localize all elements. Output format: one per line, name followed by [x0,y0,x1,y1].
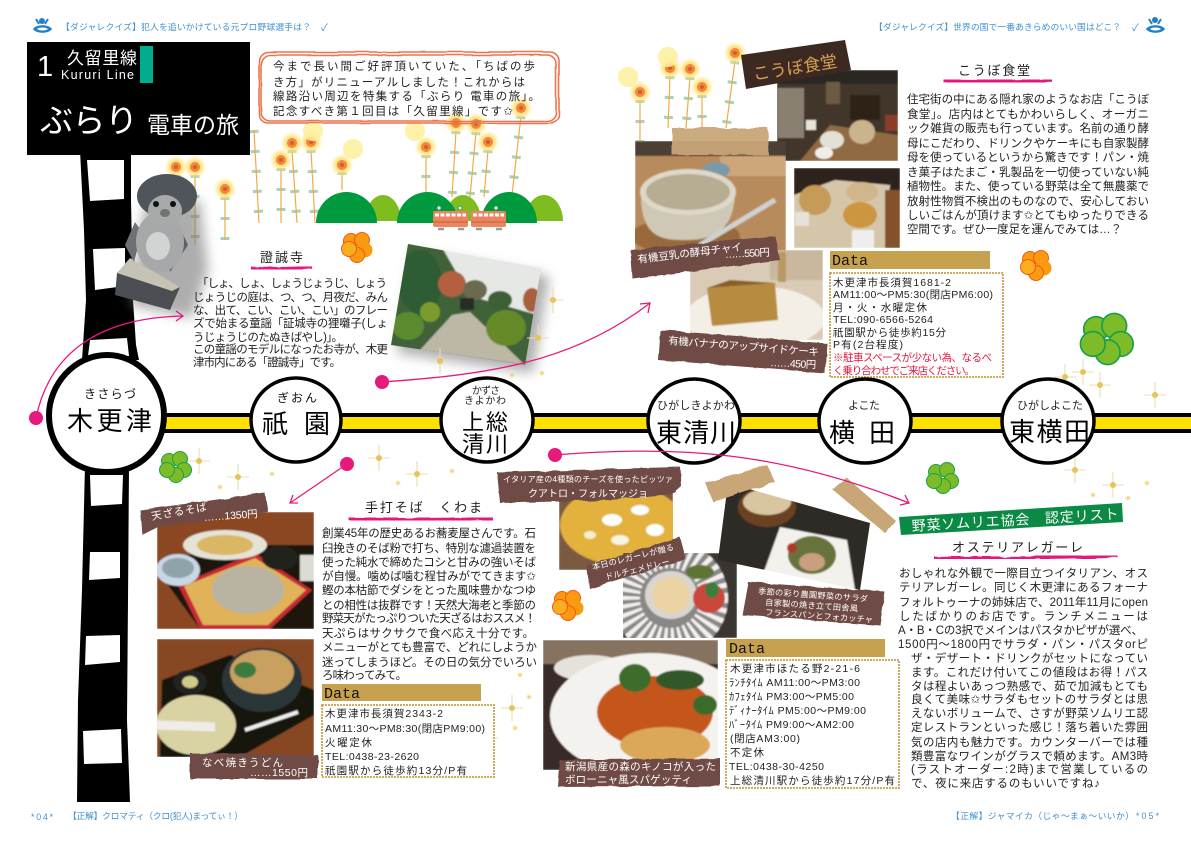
temple text: この童謡のモデルになったお寺が、木更 [193,342,388,356]
body text: 定レストランといった感じ！落ち着いた雰囲 [911,720,1148,734]
photo: pizza [559,493,673,570]
body text: ます。これだけ付いてこの値段はお得！パス [911,665,1148,679]
temple text [193,277,388,369]
page number: *05* [1136,811,1160,821]
data header: Data [324,686,360,703]
heading: こうぼ食堂 [958,63,1030,78]
icon: blue mascot logo right [1146,17,1165,33]
body text: ろ味わってみて。 [322,669,407,682]
reading: かずさ [472,385,500,397]
body text: 空間です。ぜひ一度足を運んでみては…？ [907,223,1122,236]
body text: したばかりのお店です。ランチメニューは [899,610,1148,623]
station: Kisarazu [49,355,164,472]
body text [898,566,1148,790]
body text: おしゃれな外観で一際目立つイタリアン、オス [899,566,1148,580]
photo: tanuki statue [115,174,208,318]
rail: vertical black track [77,150,139,802]
green certified label: 野菜ソムリエ協会 認定リスト [911,506,1119,534]
intro text: 今まで長い間ご好評頂いていた、「ちばの歩 [273,59,535,73]
photo: dessert [623,553,737,638]
intro text: 記念すべき第１回目は「久留里線」です✩ [273,104,513,118]
photo: bread [794,168,900,248]
reading: きさらづ [84,387,136,401]
body text: 使った純水で締めたコシと甘みの強いそば [322,555,536,569]
temple text: じょうじの庭は、つ、つ、月夜だ、みん [193,290,388,304]
data box [830,273,1003,377]
quiz answer: 【正解】ジャマイカ（じゃ～まぁ～いいか） [951,810,1134,821]
name: 祇 園 [262,409,330,439]
quiz answer: 【正解】クロマティ（クロ(犯人)まってぃ！） [68,810,243,821]
footer right [951,810,1160,821]
photo: nabeyaki udon [156,639,314,757]
caption subtitle: ドルチェメドレー [604,557,671,582]
caption text: 本日のレガーレが贈る [591,542,675,572]
panel: soba kuwama [140,493,538,779]
caption text: なべ焼きうどん [202,757,283,769]
rough red border [259,52,559,123]
body text: 天ぷらはサクサクで食べ応え十分です。 [322,626,534,640]
body text: A・B・Cの3択でメインはパスタかピザが選べ、 [898,623,1143,637]
heading: オステリアレガーレ [952,540,1083,555]
decorative flower garden: left [164,96,533,245]
data box: 上総清川駅から徒歩約17分/P有 [730,774,895,787]
name line 2: 清川 [462,432,508,457]
panel: temple [193,232,550,373]
data box: ﾊﾞｰﾀｲﾑ PM9:00～AM2:00 [729,719,854,731]
data box: TEL:0438-30-4250 [729,761,824,773]
heading: 手打そば くわま [365,500,482,515]
caption: pizza [497,467,681,503]
panel: osteria legare text [898,503,1148,790]
caption: banana cake [658,330,827,373]
caption line 2: 自家製の焼き立て田舎風 [765,597,858,613]
intro text: き方」がリニューアルしました！これからは [273,75,525,89]
photo: pasta [543,640,718,770]
caption line 3: フランスパンとフォカッチャ [765,608,873,625]
data box: 木更津市長須賀2343-2 [325,707,443,720]
line name: 久留里線 [67,49,137,68]
caption: salad [742,582,885,625]
data box: ﾃﾞｨﾅｰﾀｲﾑ PM5:00～PM9:00 [729,705,866,717]
data box: く乗り合わせでご来店ください。 [833,364,975,377]
sign lettering: こうぼ食堂 [752,52,839,84]
body text: ザ・デザート・ドリンクがセットになってい [911,651,1148,665]
icon: orange train [433,206,506,229]
body text: 迷ってしまうほど。その日の気分でいろい [322,655,537,669]
caption: pasta [558,758,720,787]
caption subtitle: ボローニャ風スパゲッティ [565,774,692,786]
data header [726,639,885,658]
body text: テリアレガーレ。同じく木更津にあるフォーナ [899,581,1148,594]
station: Yokota [819,379,911,463]
body text: しいごはんが頂けます✩とてもゆったりできる [907,208,1149,222]
intro box [259,52,559,123]
temple text: 「しょ、しょ、しょうじょうじ、しょう [197,277,387,290]
quiz header right [874,17,1165,34]
tape: salad right [833,478,895,533]
body text: 類豊富なワインがグラスで頼めます。AM3時 [911,749,1148,763]
body text [907,92,1150,236]
data header: Data [832,253,868,270]
caption text: イタリア産の4種類のチーズを使ったピッツァ [503,474,673,484]
quiz question left: 【ダジャレクイズ】犯人を追いかけている元プロ野球選手は？ [61,21,311,32]
arrow: Kazusa-Kiyokawa to osteria [548,448,909,505]
photo: shop interior [777,70,898,161]
body text: 創業45年の歴史あるお蕎麦屋さんです。石 [322,526,536,540]
caption: dessert [587,537,686,589]
data box: ※駐車スペースが少ない為、なるべ [833,351,992,364]
photo: salad and bread [718,489,870,590]
station: Gion [251,378,341,462]
body text: 放射性物質不検出のものなので、安心しておい [907,194,1149,208]
data box: 祇園駅から徒歩約13分/P有 [325,764,467,777]
icon: green flower centre [926,462,958,494]
data box [726,660,899,788]
body text: ック雑貨の販売も行っています。名前の通り酵 [907,121,1150,135]
icon: orange flower [342,232,372,262]
decorative flower garden: right [618,41,747,141]
footer left [31,810,243,822]
white frame around bread photo [786,161,900,250]
body text: との相性は抜群です！天然大海老と季節の [322,598,536,612]
reading line 2: きよかわ [464,395,506,407]
icon: blue mascot logo [33,18,52,33]
caption: tenzaru [140,493,268,535]
body text: 1500円～1800円でサラダ・パン・パスタorピ [898,637,1148,651]
body text [322,526,538,682]
line number: 1 [37,51,53,83]
caption subtitle: クアトロ・フォルマッジョ [528,488,648,500]
reading: ぎおん [277,391,317,405]
series title: ぶらり [40,102,138,139]
panel: osteria legare photos [497,465,899,788]
body text: で、夜に来店するのもいいですね♪ [911,777,1100,790]
green hills [316,192,563,223]
price: ……550円 [725,247,770,261]
data header [830,251,990,270]
body text: 野菜天がたっぷりついた天ざるはおススメ！ [322,611,536,625]
body text: タは程よいあっつ熟感で、茹で加減もとても [911,679,1148,693]
price: ……1350円 [203,508,258,524]
data box [322,705,494,777]
data box: ｶﾌｪﾀｲﾑ PM3:00～PM5:00 [729,691,854,703]
caption text: 有機豆乳の酵母チャイ [637,240,743,266]
temple text: ズで始まる童謡「証城寺の狸囃子(しょ [193,316,388,330]
pink underline [349,518,492,520]
horizontal yellow track [160,413,1191,433]
name: 東横田 [1009,417,1090,447]
check mark left: ✓ [321,23,328,34]
heading: 證誠寺 [260,250,303,265]
temple text: 津市内にある「證誠寺」です。 [193,355,341,369]
page number: *04* [31,812,54,822]
data box: 不定休 [730,747,764,759]
caption text: 天ざるそば [150,500,208,523]
line colour swatch [140,46,153,83]
body text: 良くて美味✩サラダもセットのサラダとは思 [911,692,1148,706]
data box: 月・火・水曜定休 [833,302,928,314]
body text: メニューがとても豊富で、どれにしようか [322,640,538,654]
quiz header left [33,18,328,34]
body text: えないボリュームで、さすが野菜ソムリエ認 [911,706,1148,720]
caption: nabeyaki [190,753,318,779]
data box: 木更津市ほたる野2-21-6 [730,662,860,675]
data box: TEL:0438-23-2620 [325,751,419,763]
data header [322,684,481,703]
quiz question right: 【ダジャレクイズ】世界の国で一番あきらめのいい国はどこ？ [874,21,1121,32]
data box: TEL:090-6566-5264 [833,314,933,326]
body text: フォルトゥーナの姉妹店で、2011年11月にopen [899,595,1148,609]
data box: 祇園駅から徒歩約15分 [833,326,946,339]
icon: green flower top right [1080,313,1133,365]
arrow: Gion to kobo [375,303,650,389]
data box: ﾗﾝﾁﾀｲﾑ AM11:00～PM3:00 [729,677,860,689]
body text: き菓子はたまご・乳製品を一切使っていない純 [907,165,1150,179]
body text: 鰹の本枯節でダシをとった風味豊かなつゆ [322,583,536,597]
name: 横 田 [829,418,895,448]
data header: Data [729,641,765,658]
photo: temple [385,240,550,373]
caption: soy chai [630,236,780,278]
reading: ひがしよこた [1017,398,1083,412]
pink underline [934,556,1118,558]
data box: AM11:00～PM5:30(閉店PM6:00) [833,289,993,301]
data box: (閉店AM3:00) [730,733,800,745]
reading: よこた [848,399,880,412]
icon: orange flower right [1020,250,1052,280]
body text: 気の店内も魅力です。カウンターバーでは種 [911,735,1148,749]
icon: green flower lower left [160,452,192,482]
station: Higashi-Kiyokawa [648,379,740,463]
data box: P有(2台程度) [833,338,903,351]
decorative sparkles [188,287,1166,751]
name: 東清川 [656,418,736,448]
tape: salad left [706,465,775,502]
arrow: Kazusa-Kiyokawa to soba [290,457,354,503]
line name latin: Kururi Line [61,68,134,82]
temple text: うじょうじのたぬきばやし)」。 [193,331,343,344]
tape [672,128,769,155]
intro text: 線路沿い周辺を特集する「ぶらり 電車の旅」。 [273,89,540,103]
name: 上総 [462,410,508,435]
body text: (ラストオーダー:2時)まで営業しているの [911,762,1148,776]
data box: 火曜定休 [325,737,372,749]
pink underline [944,80,1052,82]
caption text: 有機バナナのアップサイドケーキ [668,334,819,359]
price: ……450円 [770,357,816,371]
caption text: 季節の彩り農園野菜のサラダ [758,586,868,604]
panel: kobo shokudo [630,40,1150,377]
body text: 母にこだわり、ドリンクやケーキにも自家製酵 [907,136,1150,150]
photo: cake [690,250,823,340]
body text: 植物性。また、使っている野菜は全て無農薬で [907,179,1149,193]
body text: が自慢。噛めば噛む程甘みがでてきます✩ [322,569,536,583]
price: ……1550円 [250,767,308,779]
station: Kazusa-Kiyokawa [441,378,533,462]
body text: 臼挽きのそば粉で打ち、特別な濾過装置を [322,541,536,555]
title block [27,42,250,155]
arrow: Kisarazu to temple [29,311,183,425]
photo: tenzaru soba [156,512,314,629]
body text: 住宅街の中にある隠れ家のようなお店「こうぼ [907,92,1150,106]
data box: AM11:30～PM8:30(閉店PM9:00) [325,723,485,735]
body text: 食堂」。店内はとてもかわいらしく、オーガニ [907,107,1149,121]
pink underline [251,267,312,269]
caption text: 新潟県産の森のキノコが入った [565,760,716,773]
temple text: な、出て、こい、こい、こい」のフレー [193,304,388,317]
series subtitle: 電車の旅 [147,112,239,138]
check mark right: ✓ [1132,23,1139,34]
body text: 母を使っているというから驚きです！パン・焼 [907,150,1150,164]
station: Higashi-Yokota [1002,379,1094,463]
name: 木更津 [67,406,152,436]
reading: ひがしきよかわ [657,398,735,412]
data box: 木更津市長須賀1681-2 [833,276,951,289]
intro text [273,59,540,118]
icon: orange flower lower centre [552,590,584,620]
shop sign [741,40,851,89]
photo: soy chai [630,141,786,254]
